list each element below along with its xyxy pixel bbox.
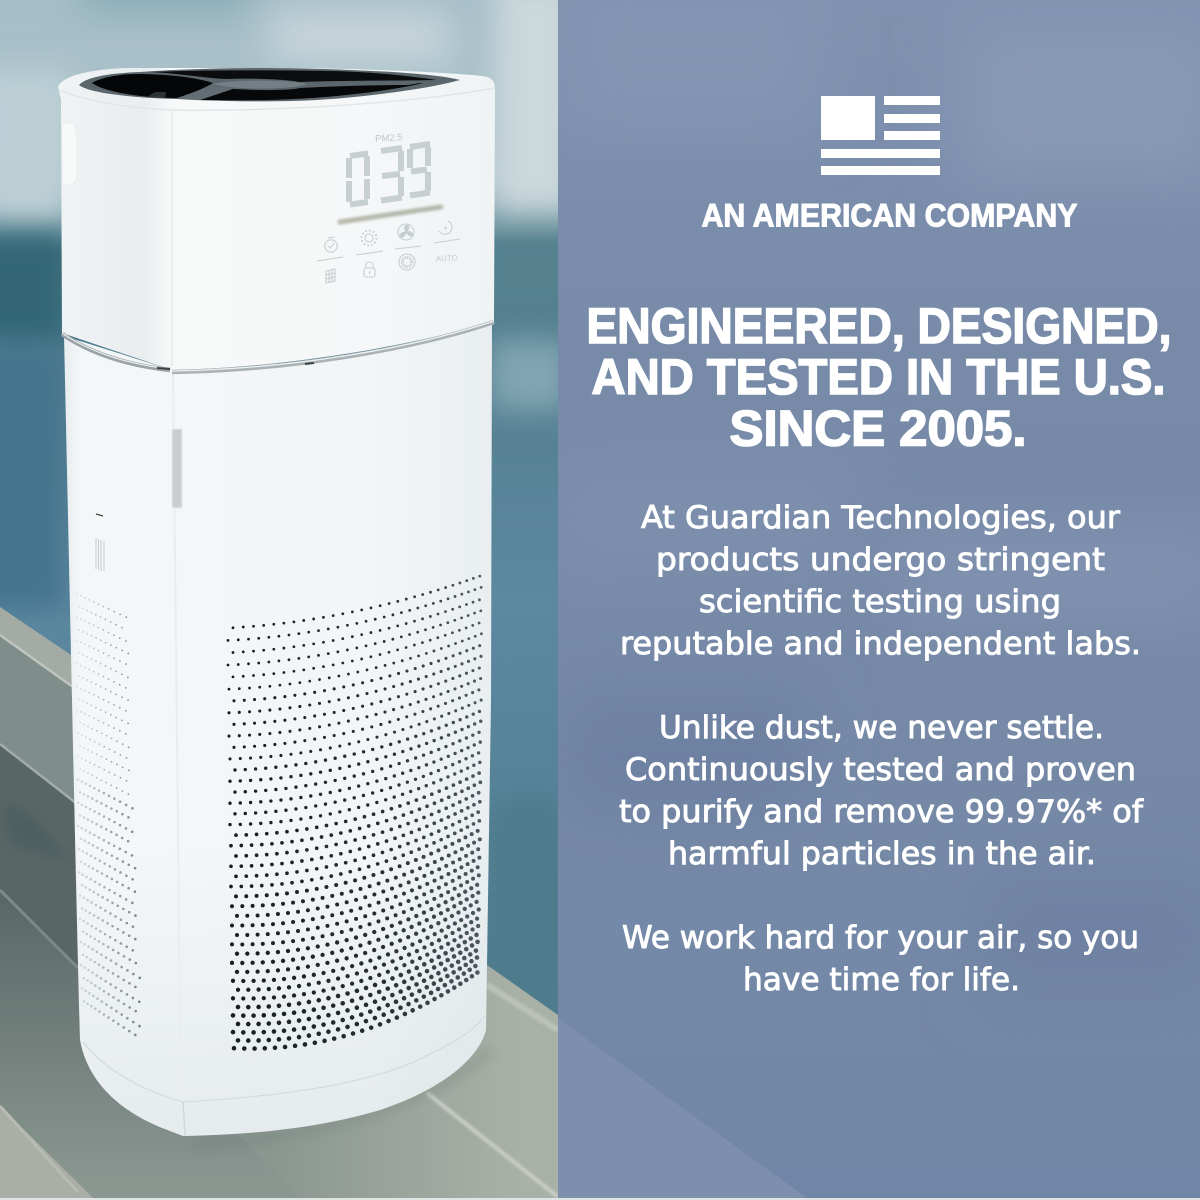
icon: fan [398,224,414,240]
icon: filter wheel [399,254,415,270]
PM2.5 label: PM2.5 [375,132,403,145]
marble counter [0,607,558,1200]
body paragraph: closing line: have time for life. [743,962,1020,998]
background photo: blurred room and marble counter [0,0,580,1200]
body paragraph: testing: products undergo stringent [656,542,1105,578]
headline: AND TESTED IN THE U.S. [592,348,1166,405]
body paragraph: never settle [619,710,1144,872]
small side mark [96,514,103,516]
body paragraph: never settle: Continuously tested and proven [625,752,1136,788]
purifier top housing [58,68,495,370]
perforated front grille [228,575,483,1049]
body paragraph: testing: At Guardian Technologies, our [641,500,1120,536]
icon: brightness [362,230,376,246]
icon: timer [325,237,337,252]
body paragraph: never settle: to purify and remove 99.97%* of [619,794,1144,830]
body paragraph: closing line: We work hard for your air, so you [622,920,1139,956]
logo: American flag [821,96,940,175]
body paragraph: testing [620,500,1141,662]
perforated side grille [77,594,140,1038]
body paragraph: testing: scientific testing using [699,584,1061,620]
icon: night mode [439,221,452,234]
body paragraph: never settle: harmful particles in the air. [668,836,1096,872]
top air outlet with fan [79,68,460,101]
body paragraph: testing: reputable and independent labs. [620,626,1141,662]
control panel icons [317,221,460,283]
headline: SINCE 2005. [730,400,1026,456]
icon: lock [364,262,375,277]
body paragraph: never settle: Unlike dust, we never settle. [659,710,1104,746]
translucent counter shape [558,1018,807,1198]
headline [586,297,1172,456]
panel: blue text background [558,0,1200,771]
logo caption: AN AMERICAN COMPANY [702,198,1078,234]
side slot [172,429,182,508]
bottom edge line [0,1198,1200,1200]
air purifier product [58,68,495,1136]
body paragraph: closing line [622,920,1139,998]
AUTO label: AUTO [436,253,458,264]
digital display showing 039 [349,144,430,204]
display light bar [340,207,441,222]
side vents [96,538,104,571]
silver seam band [62,321,494,372]
purifier lower body [64,322,492,1136]
icon: filter [326,269,335,283]
